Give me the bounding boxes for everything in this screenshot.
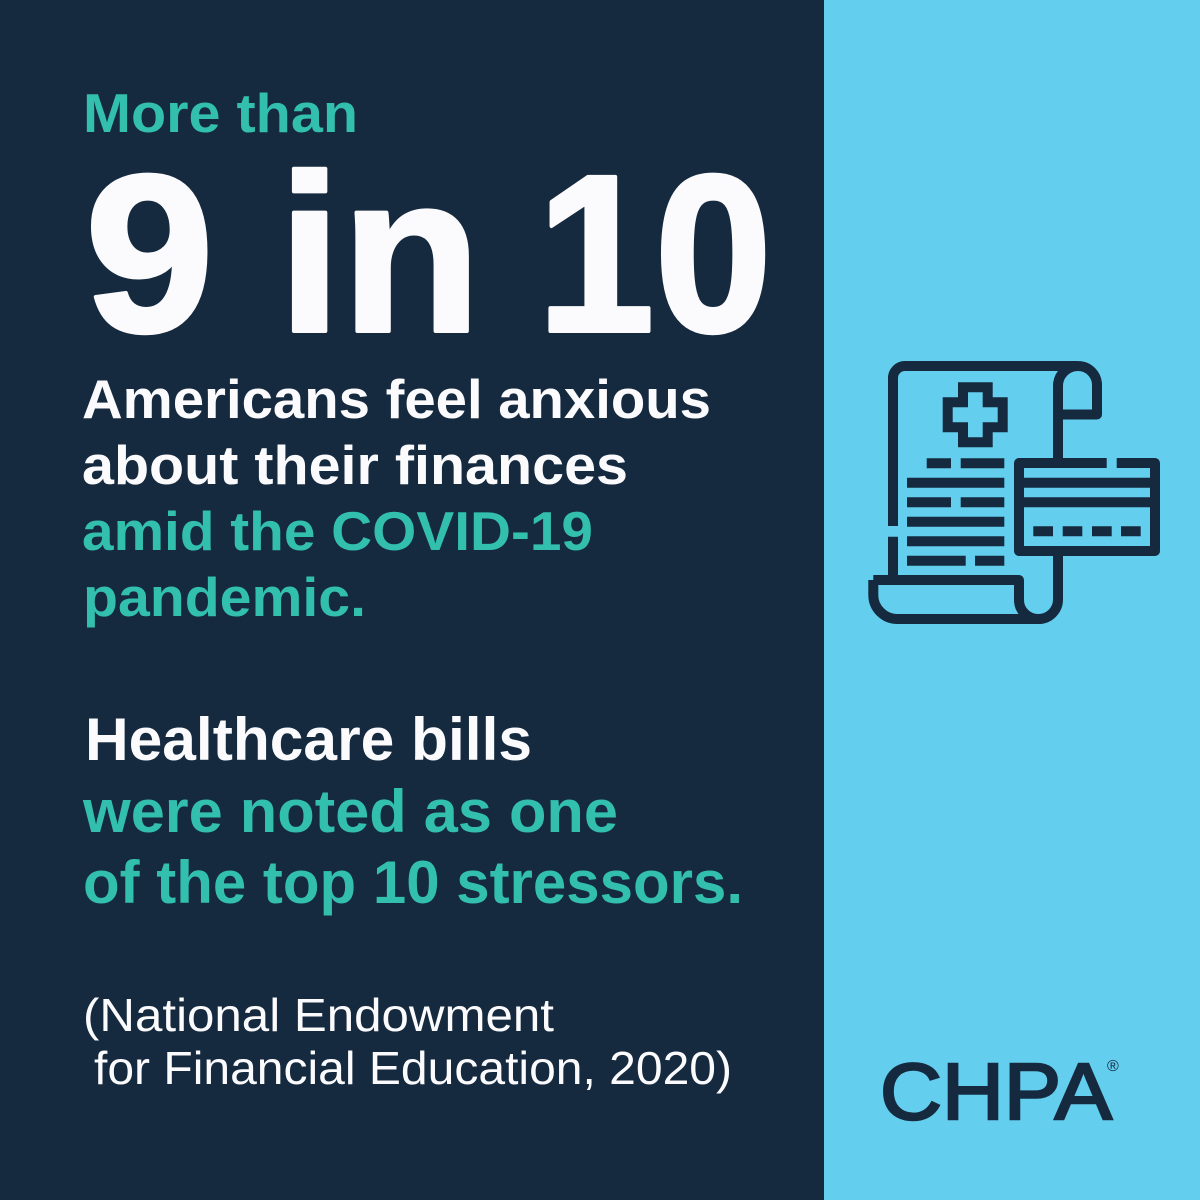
icon: medical bill scroll with payment card [873,366,1155,619]
headline statistic: 9 in 10: in [278,129,481,379]
text block: source citation: (National Endowment [83,989,554,1041]
text block: source citation: for Financial Education, 2020) [94,1042,732,1094]
text block: anxiety finding: about their finances [82,434,628,496]
text block: healthcare bills finding: of the top 10 stressors. [83,849,743,916]
text block: anxiety finding: Americans feel anxious [82,368,711,430]
text block: anxiety finding [82,368,711,628]
heading: more than: More than [83,82,358,144]
scroll outline [873,366,1097,619]
logo: CHPA: ® [1107,1058,1119,1075]
payment card [1019,463,1155,551]
headline statistic: 9 in 10: 10 [537,129,772,379]
text block: anxiety finding: amid the COVID-19 [82,500,593,562]
headline statistic: 9 in 10 [85,129,772,379]
text block: source citation [83,989,732,1094]
text block: anxiety finding: pandemic. [83,566,366,628]
logo: CHPA: CHPA [880,1047,1113,1136]
text block: healthcare bills finding: were noted as one [82,778,618,845]
medical cross [948,387,1003,442]
panel: navy text panel [0,0,824,1200]
text block: healthcare bills finding: Healthcare bills [85,706,532,773]
text block: healthcare bills finding [82,706,743,916]
headline statistic: 9 in 10: 9 [85,129,214,379]
bill text lines [907,463,1004,561]
panel: light blue side panel [824,0,1200,1200]
